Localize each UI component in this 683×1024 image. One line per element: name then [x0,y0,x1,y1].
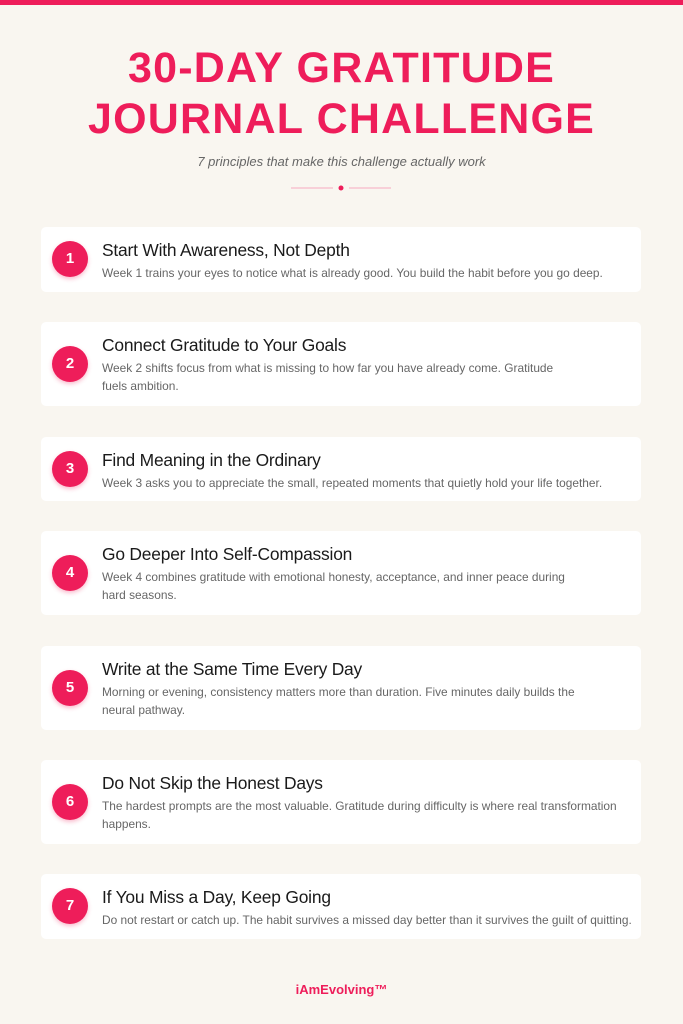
subtitle: 7 principles that make this challenge actually work [197,154,486,169]
card 5 [41,646,641,730]
card 5: Morning or evening, consistency matters more than duration. Five minutes daily builds the [102,685,575,699]
card 3: Week 3 asks you to appreciate the small, repeated moments that quietly hold your life together. [102,476,602,490]
card 3: Find Meaning in the Ordinary [102,450,321,470]
card 1: Start With Awareness, Not Depth [102,240,350,260]
card 4: hard seasons. [102,588,177,602]
card 6: 6 [66,793,74,810]
card 4: 4 [66,564,74,581]
card 7: If You Miss a Day, Keep Going [102,887,331,907]
card 4: Week 4 combines gratitude with emotional honesty, acceptance, and inner peace during [102,570,565,584]
card 7: 7 [66,897,74,914]
card 2: fuels ambition. [102,379,179,393]
card 2: Week 2 shifts focus from what is missing to how far you have already come. Gratitude [102,361,553,375]
card 1: 1 [66,250,74,267]
card 2 [41,322,641,406]
title: 30-DAY GRATITUDE [128,44,555,92]
card 1 [41,227,641,292]
card 6: Do Not Skip the Honest Days [102,773,323,793]
card 3: 3 [66,460,74,477]
card 6: happens. [102,817,151,831]
divider ornament [291,186,391,190]
title [88,44,595,143]
card 4 [41,531,641,615]
card 6: The hardest prompts are the most valuable. Gratitude during difficulty is where real transformation [102,799,617,813]
card 2: 2 [66,355,74,372]
card 2: Connect Gratitude to Your Goals [102,335,346,355]
card 4: Go Deeper Into Self-Compassion [102,544,352,564]
footer brand: iAmEvolving™ [296,982,387,997]
card 7 [41,874,641,939]
card 6 [41,760,641,844]
title: JOURNAL CHALLENGE [88,95,595,143]
card 5: Write at the Same Time Every Day [102,659,362,679]
card 1: Week 1 trains your eyes to notice what is already good. You build the habit before you go deep. [102,266,603,280]
card 5: 5 [66,679,74,696]
card 5: neural pathway. [102,703,185,717]
card 7: Do not restart or catch up. The habit survives a missed day better than it survives the guilt of quitting. [102,913,632,927]
card 3 [41,437,641,501]
